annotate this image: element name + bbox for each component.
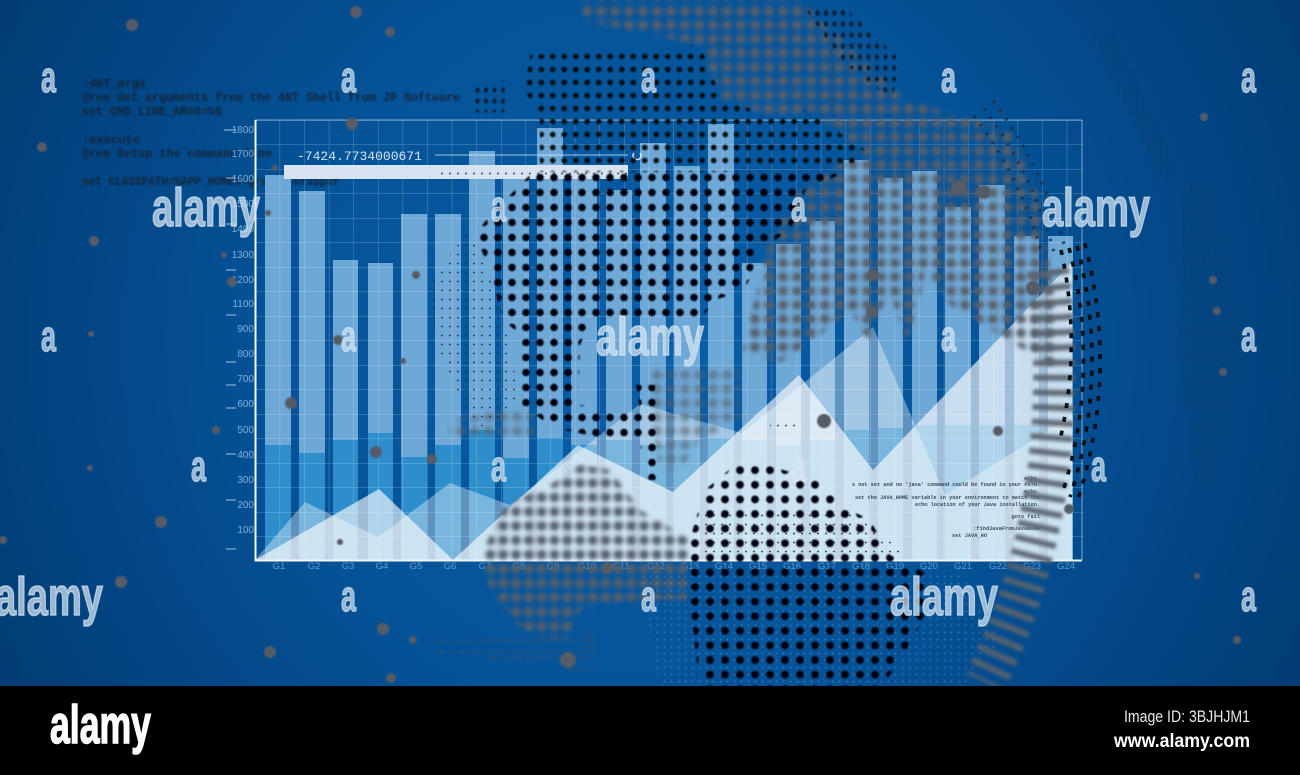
globe rim: black dots — [1060, 244, 1100, 499]
watermark: small a marks: a — [41, 312, 56, 361]
y axis labels: 1300 — [232, 250, 254, 261]
x axis labels: G7 — [479, 561, 491, 572]
watermark: small a marks: a — [941, 312, 956, 361]
code text: chart lower right: echo. — [1024, 476, 1040, 482]
readout leader line and spinner — [435, 153, 641, 160]
y axis labels: 1800 — [232, 125, 254, 136]
x axis labels: G18 — [852, 561, 870, 572]
x axis labels: G19 — [886, 561, 904, 572]
code text: top left — [82, 78, 460, 189]
bar chart — [265, 124, 1073, 560]
code text: chart lower right — [852, 476, 1040, 539]
y axis labels: 1100 — [232, 299, 254, 310]
watermark: alamy words — [0, 178, 1150, 627]
continent: blurred grey isthmus — [450, 405, 535, 440]
watermark: small a marks: a — [941, 53, 956, 102]
x axis labels: G9 — [547, 561, 559, 572]
code text: chart lower right: goto fail — [1011, 514, 1040, 520]
watermark: small a marks: a — [41, 53, 56, 102]
x axis labels: G24 — [1057, 561, 1075, 572]
code text: chart lower right: echo. — [1024, 489, 1040, 495]
x axis labels — [273, 561, 1075, 572]
y axis labels: 1400 — [232, 224, 254, 235]
globe rim: grey streaks — [985, 270, 1054, 682]
y axis labels: 1200 — [232, 275, 254, 286]
continent: blurred central isles — [650, 365, 740, 470]
watermark: small a marks: a — [491, 182, 506, 231]
fine dots: south america halo — [640, 570, 1000, 690]
watermark: small a marks: a — [641, 53, 656, 102]
watermark: small a marks: a — [791, 182, 806, 231]
continent: north america lower — [475, 170, 850, 480]
footer strip — [0, 686, 1300, 775]
watermark: small a marks: a — [191, 442, 206, 491]
bars: lower dark segments — [265, 425, 1073, 560]
far globe rim: ghost dots — [1090, 30, 1240, 500]
x axis labels: G3 — [342, 561, 354, 572]
watermark: small a marks: a — [1241, 572, 1256, 621]
y axis labels — [232, 125, 254, 536]
island: arctic dots — [805, 8, 900, 100]
continent: blurred Australia — [483, 465, 690, 640]
watermark: small a marks: a — [341, 53, 356, 102]
area series: back — [255, 327, 1073, 560]
bars: upper light segments — [265, 124, 1073, 560]
x axis labels: G21 — [954, 561, 972, 572]
code text: top left: @rem Get arguments from the 4NT Shell from JP Software — [82, 92, 460, 105]
x axis labels: G2 — [308, 561, 320, 572]
watermark: small a marks: a — [1241, 53, 1256, 102]
x axis labels: G12 — [647, 561, 665, 572]
x axis labels: G5 — [410, 561, 422, 572]
code text: top left: set CMD_LINE_ARGS=%$ — [82, 106, 222, 119]
watermark: alamy words: alamy — [890, 567, 998, 627]
x axis labels: G6 — [444, 561, 456, 572]
code text: faint bottom ghost: echo. — [581, 644, 597, 650]
watermark: small a marks: a — [1091, 442, 1106, 491]
y axis labels: 1600 — [232, 174, 254, 185]
code text: top left: :execute — [82, 134, 140, 147]
y axis labels: 1500 — [232, 199, 254, 210]
y axis labels: 500 — [237, 425, 254, 436]
code text: faint bottom ghost: echo location of your Java installation. — [487, 656, 597, 662]
code text: chart lower right: s not set and no 'java' command could be found in your PATH. — [852, 482, 1040, 488]
x axis labels: G1 — [273, 561, 285, 572]
code text: chart lower right: set the JAVA_HOME variable in your environment to match the — [855, 495, 1040, 501]
footer logo: alamy — [50, 695, 151, 755]
readout value: -7424.7734000671 — [297, 149, 422, 164]
globe rim: upper stripes — [974, 101, 1065, 254]
x axis labels: G22 — [989, 561, 1007, 572]
footer image id: Image ID: 3BJHJM1 — [1124, 707, 1250, 726]
y axis labels: 1700 — [232, 149, 254, 160]
y axis labels: 900 — [237, 324, 254, 335]
y axis labels: 600 — [237, 399, 254, 410]
code text: chart lower right: set JAVA_HO — [952, 533, 987, 539]
chart axes — [256, 120, 1082, 560]
x axis labels: G20 — [920, 561, 938, 572]
watermark: small a marks: a — [341, 312, 356, 361]
footer url: www.alamy.com — [1113, 731, 1250, 752]
code text: chart lower right: echo location of your Java installation. — [915, 502, 1040, 508]
continent: south america — [685, 465, 935, 690]
x axis labels: G4 — [376, 561, 388, 572]
y axis labels: 700 — [237, 374, 254, 385]
code text: top left: set CLASSPATH=%APP_HOME%\gradle\wrapper — [82, 176, 340, 189]
x axis labels: G14 — [715, 561, 733, 572]
code text: top left: :4NT_args — [82, 78, 146, 91]
continent: blurred grey landmass north and east — [580, 0, 1060, 372]
watermark: alamy words: alamy — [1042, 178, 1150, 238]
watermark: small a marks: a — [641, 572, 656, 621]
island: alaska dots — [472, 80, 505, 112]
y axis labels: 400 — [237, 450, 254, 461]
watermark: small a marks: a — [491, 442, 506, 491]
x axis labels: G17 — [818, 561, 836, 572]
code text: faint bottom ghost: set the JAVA_HOME variable in your environment to match the — [437, 650, 597, 656]
y axis labels: 100 — [237, 525, 254, 536]
watermark: small a marks: a — [1241, 312, 1256, 361]
watermark: alamy words: alamy — [152, 178, 260, 238]
x axis labels: G15 — [749, 561, 767, 572]
continent: north america upper — [525, 45, 865, 172]
globe — [430, 0, 1100, 690]
x axis labels: G8 — [513, 561, 525, 572]
x axis labels: G11 — [612, 561, 630, 572]
code text: faint bottom ghost — [432, 632, 597, 674]
code text: faint bottom ghost: s not set and no 'java' command could be found in your PATH. — [432, 638, 597, 644]
x axis labels: G13 — [681, 561, 699, 572]
watermark: alamy words: alamy — [596, 307, 704, 367]
code text: faint bottom ghost: echo. — [581, 632, 597, 638]
y axis labels: 200 — [237, 500, 254, 511]
y axis ticks — [224, 130, 236, 549]
code text: chart lower right: :findJavaFromJavaHome — [973, 526, 1040, 532]
x axis labels: G23 — [1023, 561, 1041, 572]
code text: top left: @rem Setup the command line — [82, 148, 272, 161]
y axis labels: 800 — [237, 349, 254, 360]
code text: faint bottom ghost: goto fail — [568, 668, 597, 674]
watermark: small a marks — [41, 53, 1256, 621]
watermark: small a marks: a — [791, 442, 806, 491]
x axis labels: G10 — [578, 561, 596, 572]
progress bar — [284, 165, 628, 179]
area series: front — [255, 262, 1072, 560]
fine dots: over chart left — [430, 168, 905, 553]
y axis labels: 300 — [237, 475, 254, 486]
x axis labels: G16 — [783, 561, 801, 572]
watermark: small a marks: a — [341, 572, 356, 621]
